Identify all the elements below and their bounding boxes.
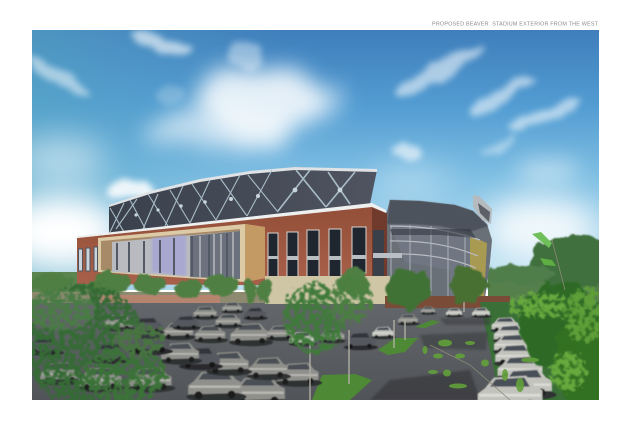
tall windows [268,227,366,281]
trees at building base [28,267,486,308]
west windows [78,247,98,271]
caption: PROPOSED BEAVER STADIUM EXTERIOR FROM THE WEST [432,22,599,28]
scoreboard [473,195,492,224]
foreground tree right [508,232,599,400]
ground [32,276,600,400]
tree trunks [310,296,464,400]
roof canopy [109,167,377,233]
shadows on pavement [370,318,490,400]
grass islands [312,320,440,400]
sky with clouds [0,27,599,290]
entrance portal [98,224,265,282]
stadium bowl [386,200,492,300]
distant tree line [32,236,616,304]
middle tree [283,276,372,354]
parking lot cars [28,302,492,408]
brick facade [77,203,402,286]
foreground branches [422,240,565,400]
right row of cars [476,316,557,400]
foreground tree left [24,283,167,407]
rendering illustration [32,22,599,400]
